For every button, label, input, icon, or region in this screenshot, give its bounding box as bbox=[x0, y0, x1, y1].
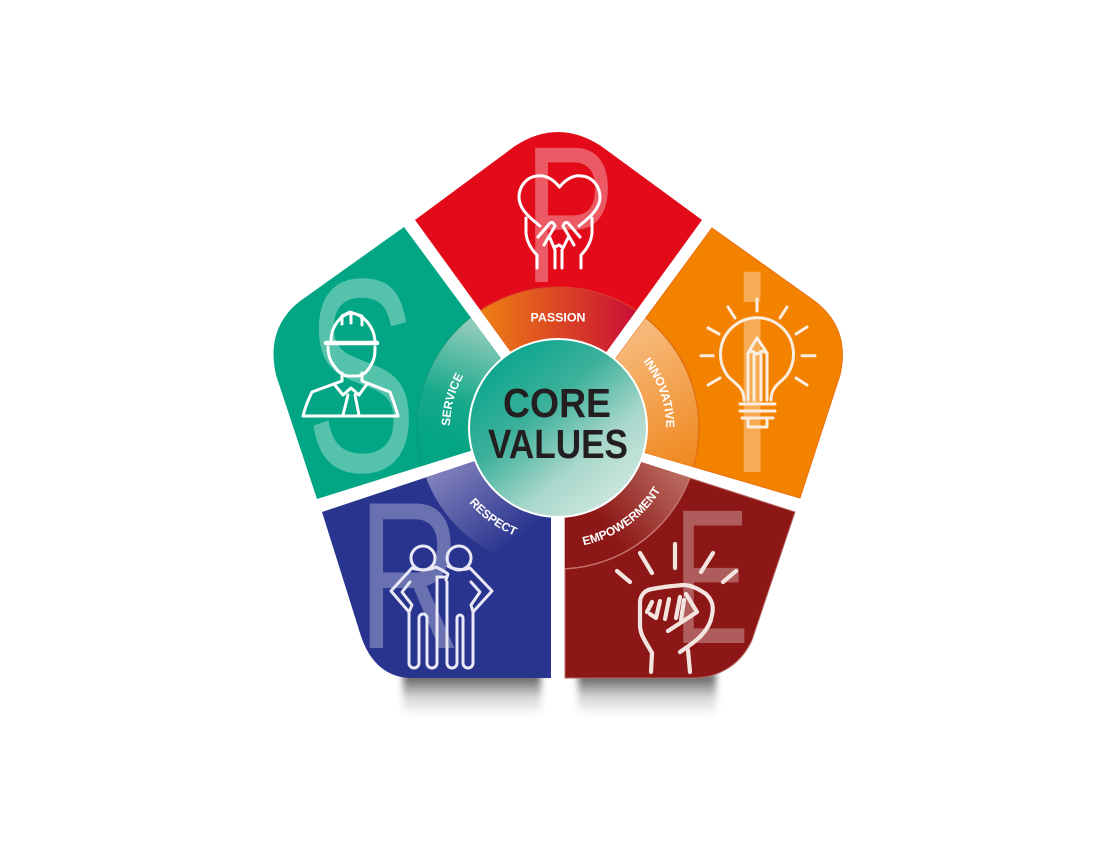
label: passion: PASSION bbox=[530, 310, 586, 324]
icon: two people bbox=[391, 546, 492, 668]
label: empowerment: EMPOWERMENT bbox=[582, 486, 660, 546]
icon: hands holding heart bbox=[519, 176, 600, 268]
center circle: core values bbox=[469, 339, 647, 517]
innovative ring segment bbox=[616, 318, 700, 466]
letter I: I bbox=[727, 210, 777, 535]
panel: empowerment bbox=[564, 462, 796, 684]
shadow under empowerment panel bbox=[578, 672, 716, 716]
panel: passion bbox=[415, 132, 702, 352]
label: innovative: INNOVATIVE bbox=[644, 357, 674, 428]
label: respect: RESPECT bbox=[470, 498, 518, 535]
panel: service bbox=[274, 222, 501, 530]
letter P: P bbox=[524, 106, 615, 324]
panel: respect bbox=[322, 459, 551, 694]
respect ring segment bbox=[426, 461, 532, 550]
icon: light bulb with pencil bbox=[701, 299, 815, 427]
icon: raised fist bbox=[617, 544, 736, 672]
gap in letter behind bulb top bbox=[738, 302, 764, 318]
letter S: S bbox=[306, 222, 416, 530]
title: core: CORE bbox=[503, 380, 611, 426]
panel: innovative bbox=[615, 210, 843, 535]
letter E: E bbox=[674, 470, 749, 684]
icon: worker with hard hat bbox=[303, 312, 398, 416]
service ring segment bbox=[416, 316, 501, 466]
title: values: VALUES bbox=[488, 421, 628, 467]
empowerment ring segment bbox=[565, 462, 690, 570]
shadow under respect panel bbox=[403, 672, 541, 716]
label: service: SERVICE bbox=[442, 372, 464, 426]
letter R: R bbox=[358, 459, 461, 694]
passion ring segment bbox=[480, 286, 636, 352]
